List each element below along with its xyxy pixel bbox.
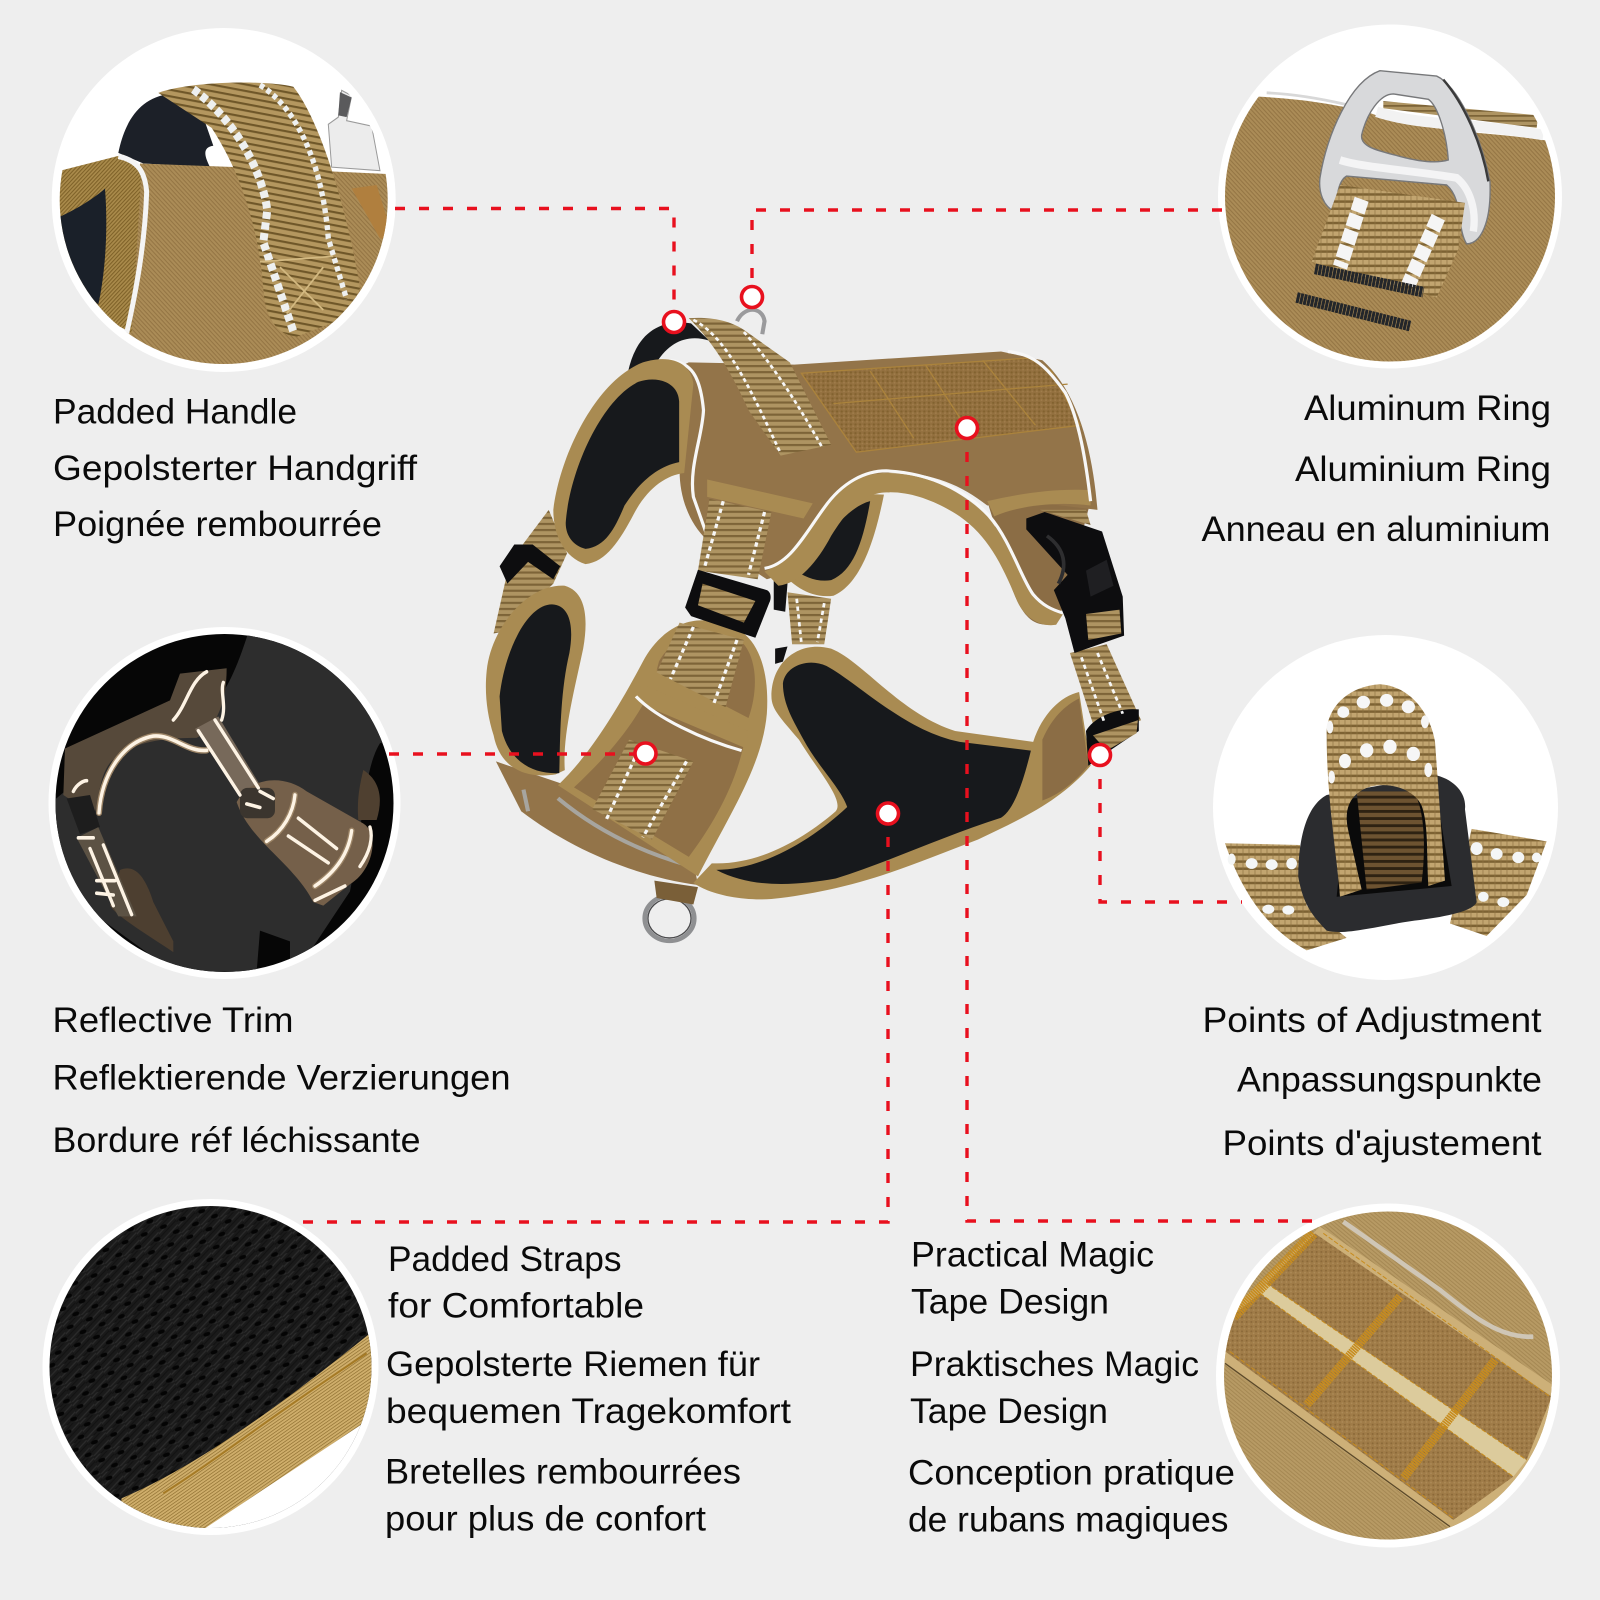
binding crease bbox=[163, 1353, 367, 1493]
arch inner pad bbox=[778, 493, 884, 596]
lower left loop mesh bbox=[500, 604, 571, 773]
label: points of adjustment: Points d'ajustement bbox=[1222, 1124, 1542, 1163]
handle strap bbox=[158, 83, 360, 337]
label: aluminum ring: Anneau en aluminium bbox=[1202, 510, 1550, 549]
dot: velcro bbox=[956, 418, 978, 438]
marker dots bbox=[635, 286, 1110, 824]
left trim wing bbox=[60, 154, 141, 333]
trim under back bbox=[707, 480, 1091, 519]
dog silhouette bbox=[43, 627, 397, 972]
buckle bbox=[67, 795, 100, 834]
panel: points of adjustment detail circle bbox=[1213, 635, 1558, 980]
body fabric bbox=[126, 164, 388, 364]
label: padded straps: bequemen Tragekomfort bbox=[386, 1392, 791, 1431]
band shadow edge bbox=[1225, 1363, 1450, 1527]
white corner bbox=[197, 1423, 380, 1540]
rear strap stitches bbox=[797, 599, 824, 642]
zigzag stitches bbox=[1230, 1233, 1550, 1518]
rear strap bbox=[788, 592, 831, 644]
black buckle bbox=[1026, 510, 1124, 653]
label: reflective trim: Reflective Trim bbox=[52, 1001, 294, 1040]
label: magic tape: Praktisches Magic bbox=[910, 1345, 1199, 1384]
label: magic tape: Tape Design bbox=[911, 1282, 1109, 1322]
label: reflective trim: Reflektierende Verzierungen bbox=[52, 1058, 511, 1098]
panel: reflective trim detail circle bbox=[43, 624, 403, 981]
right lower strap bbox=[1070, 644, 1141, 738]
line: padded straps bbox=[289, 813, 888, 1222]
left strap bbox=[77, 827, 137, 916]
centre slider bbox=[685, 570, 771, 638]
rear strap bbox=[1383, 101, 1538, 128]
white reflective piping bbox=[669, 352, 1091, 613]
label: reflective trim: Bordure réf léchissante bbox=[52, 1121, 420, 1160]
grey reflective line bbox=[523, 790, 689, 865]
handle underside bbox=[628, 322, 709, 371]
line: magic tape bbox=[967, 428, 1314, 1221]
line: adjustment bbox=[1100, 755, 1242, 902]
ring sheen bbox=[1340, 160, 1474, 231]
bottom D ring bbox=[645, 896, 694, 941]
line: padded handle bbox=[395, 208, 674, 322]
left wing trim bbox=[553, 359, 693, 564]
label: aluminum ring: Aluminium Ring bbox=[1295, 450, 1551, 489]
white stitches bbox=[1340, 199, 1438, 285]
panel: aluminum ring detail circle bbox=[1213, 24, 1562, 371]
left mesh bbox=[60, 188, 106, 304]
slider slot bbox=[1337, 795, 1452, 897]
panel: padded handle detail circle bbox=[50, 28, 396, 385]
panel: padded straps detail circle bbox=[42, 1199, 380, 1540]
back panel bbox=[63, 668, 227, 815]
reflective lines bbox=[73, 672, 371, 915]
top aluminum ring bbox=[737, 310, 765, 334]
velcro patch bbox=[801, 358, 1080, 452]
label: padded straps: for Comfortable bbox=[388, 1286, 644, 1326]
handle underside bbox=[118, 94, 213, 167]
left pad bbox=[110, 868, 173, 952]
line: aluminum ring bbox=[752, 210, 1222, 297]
lower left loop trim bbox=[486, 586, 586, 775]
webbing tab bbox=[1312, 185, 1465, 297]
black stitching bbox=[1297, 269, 1423, 326]
label: magic tape: Conception pratique bbox=[908, 1454, 1235, 1492]
label: points of adjustment: Points of Adjustment bbox=[1202, 1001, 1542, 1040]
label: padded straps: pour plus de confort bbox=[385, 1500, 706, 1538]
velcro upper row bbox=[1267, 1233, 1552, 1460]
lower body strip bbox=[496, 761, 698, 885]
centre strip bbox=[1260, 1283, 1527, 1477]
panel: magic tape detail circle bbox=[1216, 1203, 1560, 1550]
large chest mesh bbox=[716, 663, 1031, 884]
silver ring fragment bbox=[328, 90, 380, 171]
label: magic tape bbox=[908, 1236, 1235, 1540]
band edge bbox=[1223, 1227, 1560, 1528]
strap dots bbox=[1228, 842, 1541, 915]
body fabric bbox=[1213, 96, 1557, 371]
velcro lower row bbox=[1223, 1293, 1513, 1520]
D ring tab bbox=[654, 881, 698, 905]
chest pad bbox=[237, 780, 373, 906]
ring highlight bbox=[1443, 80, 1488, 181]
harness product illustration bbox=[486, 310, 1141, 941]
line: reflective trim bbox=[389, 752, 646, 756]
label: points of adjustment bbox=[1202, 1001, 1542, 1163]
label: points of adjustment: Anpassungspunkte bbox=[1237, 1060, 1542, 1100]
dot: adjuster bbox=[1090, 744, 1110, 766]
right body wedge bbox=[1042, 699, 1088, 800]
inner webbing bbox=[1357, 791, 1424, 890]
velcro corner bbox=[352, 185, 387, 238]
left strap bbox=[1225, 843, 1347, 950]
reflective halo bbox=[99, 736, 352, 886]
centre strap bbox=[195, 716, 258, 797]
webbing loop bbox=[1327, 684, 1445, 897]
connector lines bbox=[289, 208, 1314, 1222]
right slider bbox=[1086, 709, 1139, 766]
label: padded straps bbox=[385, 1240, 791, 1538]
slider bbox=[240, 788, 275, 818]
reflective strip bbox=[1343, 1222, 1533, 1337]
chest pad bbox=[558, 620, 767, 876]
ring shadow bbox=[338, 92, 352, 117]
tan binding bbox=[117, 1333, 377, 1530]
label: aluminum ring bbox=[1202, 389, 1551, 549]
arch inner mesh bbox=[794, 501, 870, 581]
reflective piping bbox=[118, 156, 147, 333]
centre webbing bbox=[657, 499, 771, 707]
label: padded handle: Gepolsterter Handgriff bbox=[53, 449, 417, 488]
trim along arch bbox=[765, 473, 1063, 625]
label: magic tape: de rubans magiques bbox=[908, 1500, 1228, 1540]
label: padded straps: Gepolsterte Riemen für bbox=[386, 1345, 760, 1384]
label: reflective trim bbox=[52, 1001, 511, 1160]
dot: mesh bbox=[878, 803, 898, 824]
reflective stitches bbox=[193, 89, 293, 331]
aluminum ring bbox=[1320, 71, 1490, 244]
right strap bbox=[1450, 829, 1547, 936]
lower loop bbox=[358, 770, 380, 820]
black slider bbox=[1298, 775, 1477, 932]
dot: handle bbox=[664, 312, 684, 332]
label: aluminum ring: Aluminum Ring bbox=[1304, 389, 1551, 428]
label: padded straps: Bretelles rembourrées bbox=[385, 1452, 741, 1492]
white piping bbox=[1377, 112, 1543, 135]
right side underlay bbox=[987, 501, 1091, 625]
handle strap bbox=[689, 318, 831, 456]
label: magic tape: Practical Magic bbox=[911, 1236, 1154, 1274]
left slider bbox=[500, 545, 560, 584]
small hardware bbox=[774, 579, 788, 664]
dot: reflective bbox=[635, 743, 656, 764]
reflective stitches on right strap bbox=[1081, 653, 1123, 722]
left adjuster strap bbox=[494, 510, 567, 633]
loop white dots bbox=[1327, 694, 1432, 784]
label: padded straps: Padded Straps bbox=[388, 1240, 622, 1279]
bar tack bbox=[260, 256, 333, 314]
left wing mesh bbox=[566, 379, 679, 549]
label: padded handle: Padded Handle bbox=[53, 392, 297, 432]
label: padded handle: Poignée rembourrée bbox=[53, 505, 382, 544]
D ring inner line bbox=[648, 899, 691, 938]
label: padded handle bbox=[53, 392, 417, 544]
large chest mesh trim bbox=[693, 647, 1091, 899]
main back panel bbox=[680, 352, 1097, 579]
label: magic tape: Tape Design bbox=[910, 1392, 1108, 1431]
dot: ring bbox=[742, 286, 762, 308]
